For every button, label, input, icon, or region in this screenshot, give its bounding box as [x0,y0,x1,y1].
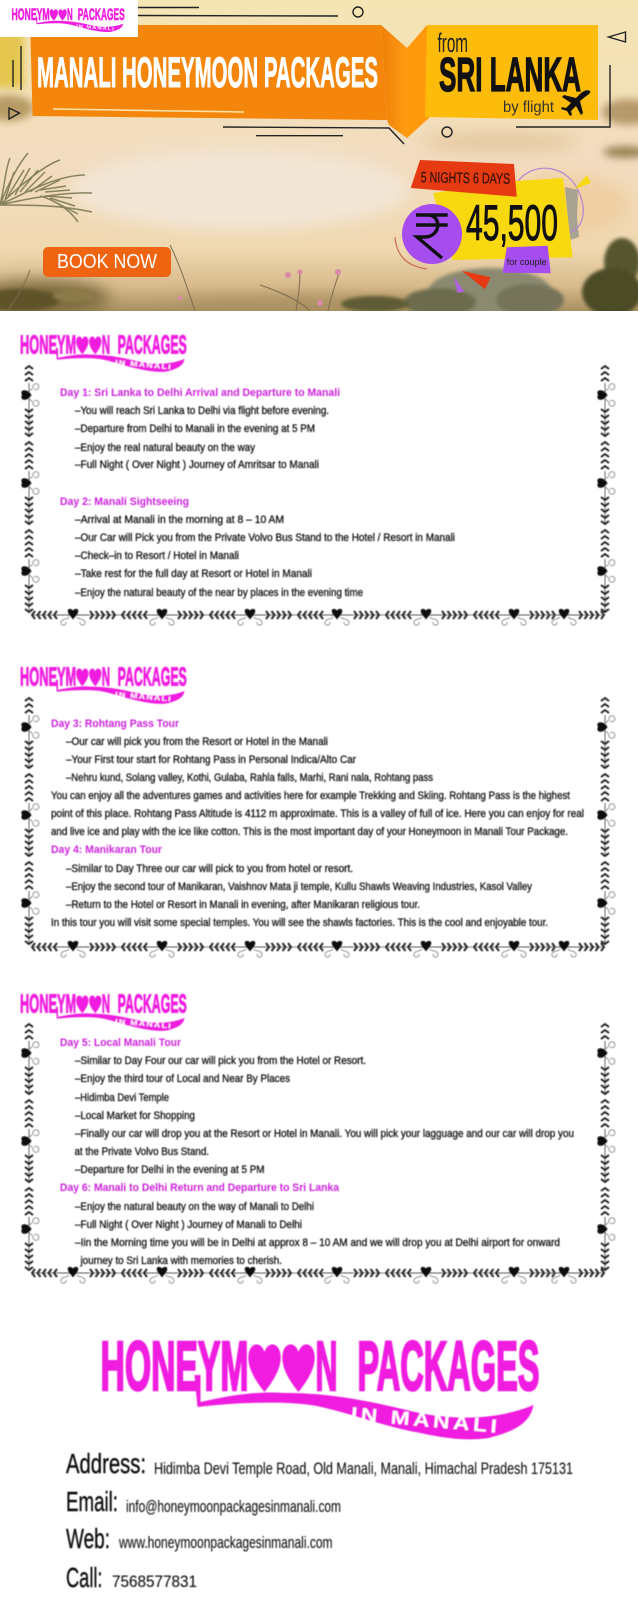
day 6 itinerary: journey to Sri Lanka with memories to cherish. [80,1255,282,1267]
day 3 itinerary: and live ice and play with the ice like cotton. This is the most important day of your Honeymoon in Manali Tour Package. [51,826,568,838]
day 5 itinerary [60,1037,574,1176]
day 6 itinerary: Day 6: Manali to Delhi Return and Departure to Sri Lanka [60,1182,340,1194]
day 1 itinerary: –Full Night ( Over Night ) Journey of Amritsar to Manali [75,459,319,471]
day 1 itinerary: Day 1: Sri Lanka to Delhi Arrival and Departure to Manali [60,387,340,399]
day 3 itinerary [51,718,584,838]
day 4 itinerary: –Return to the Hotel or Resort in Manali in evening, after Manikaran religious tour. [66,899,420,911]
banner photo background [0,0,638,316]
logo: section 3: IN MANALI [115,1018,172,1030]
day 4 itinerary: –Enjoy the second tour of Manikaran, Vaishnov Mata ji temple, Kullu Shawls Weaving Industries, Kasol Valley [66,881,532,893]
logo: section 2 [20,662,187,704]
website [66,1523,332,1554]
ornamental border [22,1024,615,1283]
hero banner: PACKAGES [78,5,125,24]
logo: banner: HONEYM [12,5,50,24]
panel: day 1 and 2 [20,330,615,625]
badge arcs [518,168,583,232]
phone: 7568577831 [112,1572,197,1591]
email: Email: [66,1486,118,1517]
day 6 itinerary: –Enjoy the natural beauty on the way of Manali to Delhi [75,1201,314,1213]
day 6 itinerary: –Iin the Morning time you will be in Delhi at approx 8 – 10 AM and we will drop you at Delhi airport for onward [75,1237,560,1249]
day 3 itinerary: –Your First tour start for Rohtang Pass in Personal Indica/Alto Car [66,754,356,766]
price: 45,500 [466,195,558,251]
logo: section 2: HONEYM [20,662,76,691]
day 5 itinerary: –Finally our car will drop you at the Resort or Hotel in Manali. You will pick your lagguage and our car will drop you [75,1128,574,1140]
price badge: for couple [507,257,547,268]
phone: Call: [66,1562,102,1593]
white logo tab [0,0,138,37]
logo: section 1 [20,330,187,372]
logo: section 1: N [102,330,110,359]
yellow origin panel: from [438,28,468,58]
day 1 itinerary: –You will reach Sri Lanka to Delhi via flight before evening. [75,405,329,417]
yellow origin panel: by flight [503,99,555,116]
logo: section 3: HONEYM [20,989,76,1018]
day 1 itinerary: –Enjoy the real natural beauty on the way [75,442,255,454]
day 5 itinerary: –Hidimba Devi Temple [75,1092,169,1104]
logo: section 1: IN MANALI [115,359,172,371]
orange title ribbon [30,25,430,138]
footer logo: N [316,1327,338,1405]
logo: banner: IN MANALI [76,24,115,32]
palm leaves [0,153,92,222]
website: www.honeymoonpackagesinmanali.com [118,1533,332,1552]
day 3 itinerary: –Our car will pick you from the Resort or Hotel in the Manali [66,736,328,748]
icon: rupee coin [402,204,462,264]
rock behind badge [565,187,579,240]
book now button [43,247,171,277]
price badge: 5 NIGHTS 6 DAYS [421,169,510,188]
day 3 itinerary: –Nehru kund, Solang valley, Kothi, Gulaba, Rahla falls, Marhi, Rani nala, Rohtang pass [66,772,433,784]
hero banner [0,0,638,316]
day 5 itinerary: at the Private Volvo Bus Stand. [74,1146,209,1158]
foreground plants [8,245,340,311]
email [66,1486,341,1517]
panel: day 3 and 4 [20,662,615,957]
day 3 itinerary: You can enjoy all the adventures games and activities here for example Trekking and Skiing. Rohtang Pass is the highest [51,790,570,802]
day 5 itinerary: –Enjoy the third tour of Local and Near By Places [75,1073,290,1085]
day 3 itinerary: point of this place. Rohtang Pass Altitude is 4112 m approximate. This is a valley of full of ice. Here you can enjoy for real [51,808,584,820]
day 3 itinerary: Day 3: Rohtang Pass Tour [51,718,180,730]
day 2 itinerary: –Take rest for the full day at Resort or Hotel in Manali [75,568,312,580]
day 5 itinerary: –Departure for Delhi in the evening at 5 PM [75,1164,264,1176]
yellow price panel [433,178,573,260]
duration tag [411,160,517,197]
icon: airplane [561,90,590,116]
logo: banner: N [67,5,73,24]
panel: day 5 and 6 [20,989,615,1283]
ornamental border [22,366,615,625]
day 4 itinerary [51,844,548,929]
footer logo: HONEYM [100,1327,248,1405]
day 4 itinerary: In this tour you will visit some special temples. You will see the shawls factories. This is the cool and enjoyable tour. [51,917,548,929]
email: info@honeymoonpackagesinmanali.com [126,1497,341,1516]
phone [66,1562,197,1593]
logo: banner [12,8,125,32]
address: Address: [66,1448,146,1479]
decorative lines and shapes [9,7,626,144]
price badge [395,160,591,293]
day 4 itinerary: –Similar to Day Three our car will pick to you from hotel or resort. [66,863,353,875]
day 2 itinerary [60,496,455,599]
day 2 itinerary: –Our Car will Pick you from the Private Volvo Bus Stand to the Hotel / Resort in Manali [75,532,455,544]
day 1 itinerary [60,387,340,471]
panel: day 1 and 2: PACKAGES [118,330,187,359]
day 2 itinerary: –Enjoy the natural beauty of the near by places in the evening time [75,587,363,599]
logo: section 3: N [102,989,110,1018]
day 5 itinerary: –Local Market for Shopping [75,1110,195,1122]
ornamental border [22,698,615,957]
day 4 itinerary: Day 4: Manikaran Tour [51,844,163,856]
day 5 itinerary: Day 5: Local Manali Tour [60,1037,182,1049]
ribbon underline [53,109,244,112]
day 2 itinerary: –Arrival at Manali in the morning at 8 – 10 AM [75,514,284,526]
footer logo [100,1327,540,1439]
day 6 itinerary [60,1182,560,1267]
day 1 itinerary: –Departure from Delhi to Manali in the evening at 5 PM [75,423,315,435]
footer logo: IN MANALI [350,1404,501,1438]
panel: day 5 and 6: PACKAGES [118,989,187,1018]
accent triangles [462,271,491,289]
address [66,1448,573,1479]
logo: section 2: N [102,662,110,691]
day 5 itinerary: –Similar to Day Four our car will pick you from the Hotel or Resort. [75,1055,366,1067]
day 6 itinerary: –Full Night ( Over Night ) Journey of Manali to Delhi [75,1219,302,1231]
day 2 itinerary: –Check–in to Resort / Hotel in Manali [75,550,239,562]
panel: day 3 and 4: PACKAGES [118,662,187,691]
logo: section 2: IN MANALI [115,691,172,703]
day 2 itinerary: Day 2: Manali Sightseeing [60,496,189,508]
yellow origin panel [425,25,598,120]
website: Web: [66,1523,110,1554]
logo: section 3 [20,989,187,1031]
couple tag [503,246,551,273]
logo: section 1: HONEYM [20,330,76,359]
contact details [66,1448,573,1593]
book now button: BOOK NOW [57,251,157,273]
